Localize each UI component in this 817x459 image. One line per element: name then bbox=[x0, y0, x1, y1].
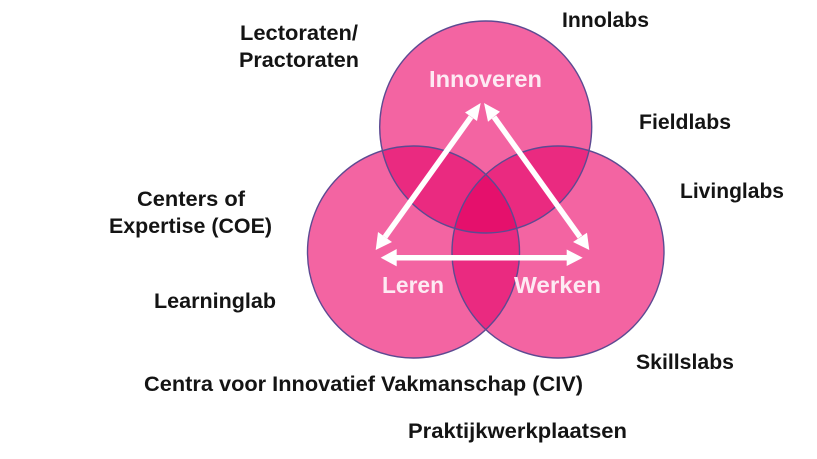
overlap: Innoveren and Werken bbox=[487, 146, 588, 228]
label: Innoveren: Innoveren bbox=[429, 66, 542, 92]
text: Learninglab: Learninglab bbox=[154, 290, 276, 313]
text: Innolabs: Innolabs bbox=[562, 9, 649, 32]
label: Werken: Werken bbox=[514, 272, 601, 298]
venn circles bbox=[308, 21, 664, 358]
circle: Leren bbox=[308, 146, 520, 358]
text: Centra voor Innovatief Vakmanschap (CIV): Centra voor Innovatief Vakmanschap (CIV) bbox=[144, 373, 583, 396]
text: Skillslabs: Skillslabs bbox=[636, 351, 734, 374]
circle: Innoveren bbox=[380, 21, 592, 233]
arrow: Innoveren to Werken bbox=[484, 103, 589, 250]
text: Praktijkwerkplaatsen: Praktijkwerkplaatsen bbox=[408, 420, 627, 443]
text: Centers of Expertise (COE): Centers of bbox=[137, 188, 246, 211]
text: Fieldlabs: Fieldlabs bbox=[639, 111, 731, 134]
label: Leren: Leren bbox=[382, 272, 444, 298]
overlap: Innoveren and Leren bbox=[383, 146, 484, 228]
venn diagram infographic bbox=[110, 12, 784, 442]
circle: Werken bbox=[452, 146, 664, 358]
arrow: Leren to Werken bbox=[381, 249, 583, 266]
overlap: Leren and Werken bbox=[452, 229, 519, 328]
arrow: Innoveren to Leren bbox=[376, 103, 481, 250]
overlap: all three bbox=[456, 176, 516, 232]
text: Centers of Expertise (COE): Expertise (COE) bbox=[109, 215, 272, 238]
text: Lectoraten/ Practoraten bbox=[239, 22, 359, 72]
text: Livinglabs: Livinglabs bbox=[680, 180, 784, 203]
circle outlines bbox=[308, 21, 664, 358]
text: Centers of Expertise (COE) bbox=[109, 188, 272, 238]
text: Lectoraten/ Practoraten: Practoraten bbox=[239, 49, 359, 72]
text: Lectoraten/ Practoraten: Lectoraten/ bbox=[240, 22, 358, 45]
